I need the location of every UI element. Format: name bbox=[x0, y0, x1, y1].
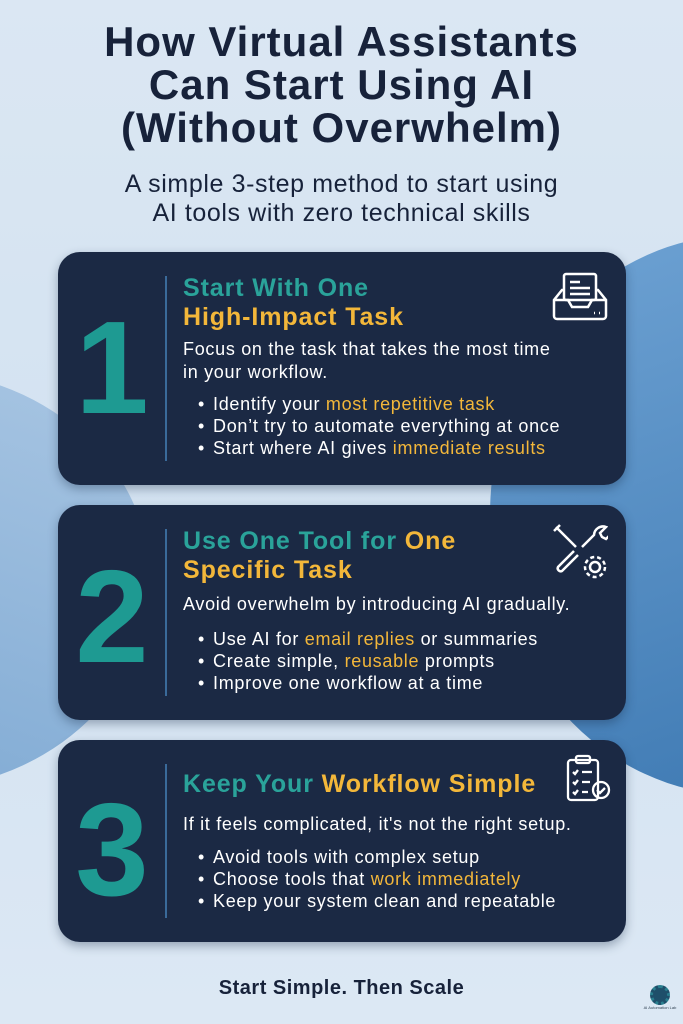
panel: step 2: Specific Task bbox=[183, 556, 353, 584]
panel: step 3 bbox=[58, 740, 626, 942]
panel: step 1: Start where AI gives immediate results bbox=[213, 438, 546, 458]
panel: step 1 bbox=[58, 252, 626, 485]
panel: step 2: Create simple, reusable prompts bbox=[213, 651, 495, 671]
panel: step 1: 1 bbox=[75, 294, 149, 441]
title: (Without Overwhelm) bbox=[121, 104, 562, 151]
panel: step 2: Use AI for email replies or summaries bbox=[213, 629, 538, 649]
footer tagline: Start Simple. Then Scale bbox=[219, 977, 464, 999]
panel: step 1: Identify your most repetitive task bbox=[213, 394, 495, 414]
panel: step 1: Start With One bbox=[183, 274, 369, 302]
panel: step 1: Focus on the task that takes the most time bbox=[183, 339, 551, 359]
title bbox=[104, 18, 579, 151]
subtitle: AI tools with zero technical skills bbox=[152, 199, 531, 227]
panel: step 1: High-Impact Task bbox=[183, 303, 404, 331]
subtitle: A simple 3-step method to start using bbox=[125, 170, 558, 198]
panel: step 3: Keep Your Workflow Simple bbox=[183, 770, 536, 798]
panel: step 3: If it feels complicated, it's not the right setup. bbox=[183, 814, 572, 834]
panel: step 2: Avoid overwhelm by introducing AI gradually. bbox=[183, 594, 570, 614]
panel: step 1: Don’t try to automate everything at once bbox=[213, 416, 560, 436]
panel: step 3: Keep your system clean and repeatable bbox=[213, 891, 556, 911]
panel: step 3: 3 bbox=[75, 776, 149, 923]
title: How Virtual Assistants bbox=[104, 18, 579, 65]
panel: step 1: in your workflow. bbox=[183, 362, 328, 382]
icon: inbox tray bbox=[552, 272, 608, 320]
logo: AI Automation Lab bbox=[644, 1005, 676, 1010]
icon: clipboard checklist bbox=[566, 754, 610, 802]
panel: step 2 bbox=[58, 505, 626, 720]
subtitle bbox=[124, 170, 558, 227]
panel: step 3: Avoid tools with complex setup bbox=[213, 847, 480, 867]
panel: step 2: Use One Tool for One bbox=[183, 527, 456, 555]
icon: wrench and gear bbox=[553, 524, 608, 578]
panel: step 3: Choose tools that work immediately bbox=[213, 869, 521, 889]
title: Can Start Using AI bbox=[149, 61, 534, 108]
panel: step 2: Improve one workflow at a time bbox=[213, 673, 483, 693]
panel: step 2: 2 bbox=[75, 543, 149, 690]
logo bbox=[644, 985, 676, 1010]
